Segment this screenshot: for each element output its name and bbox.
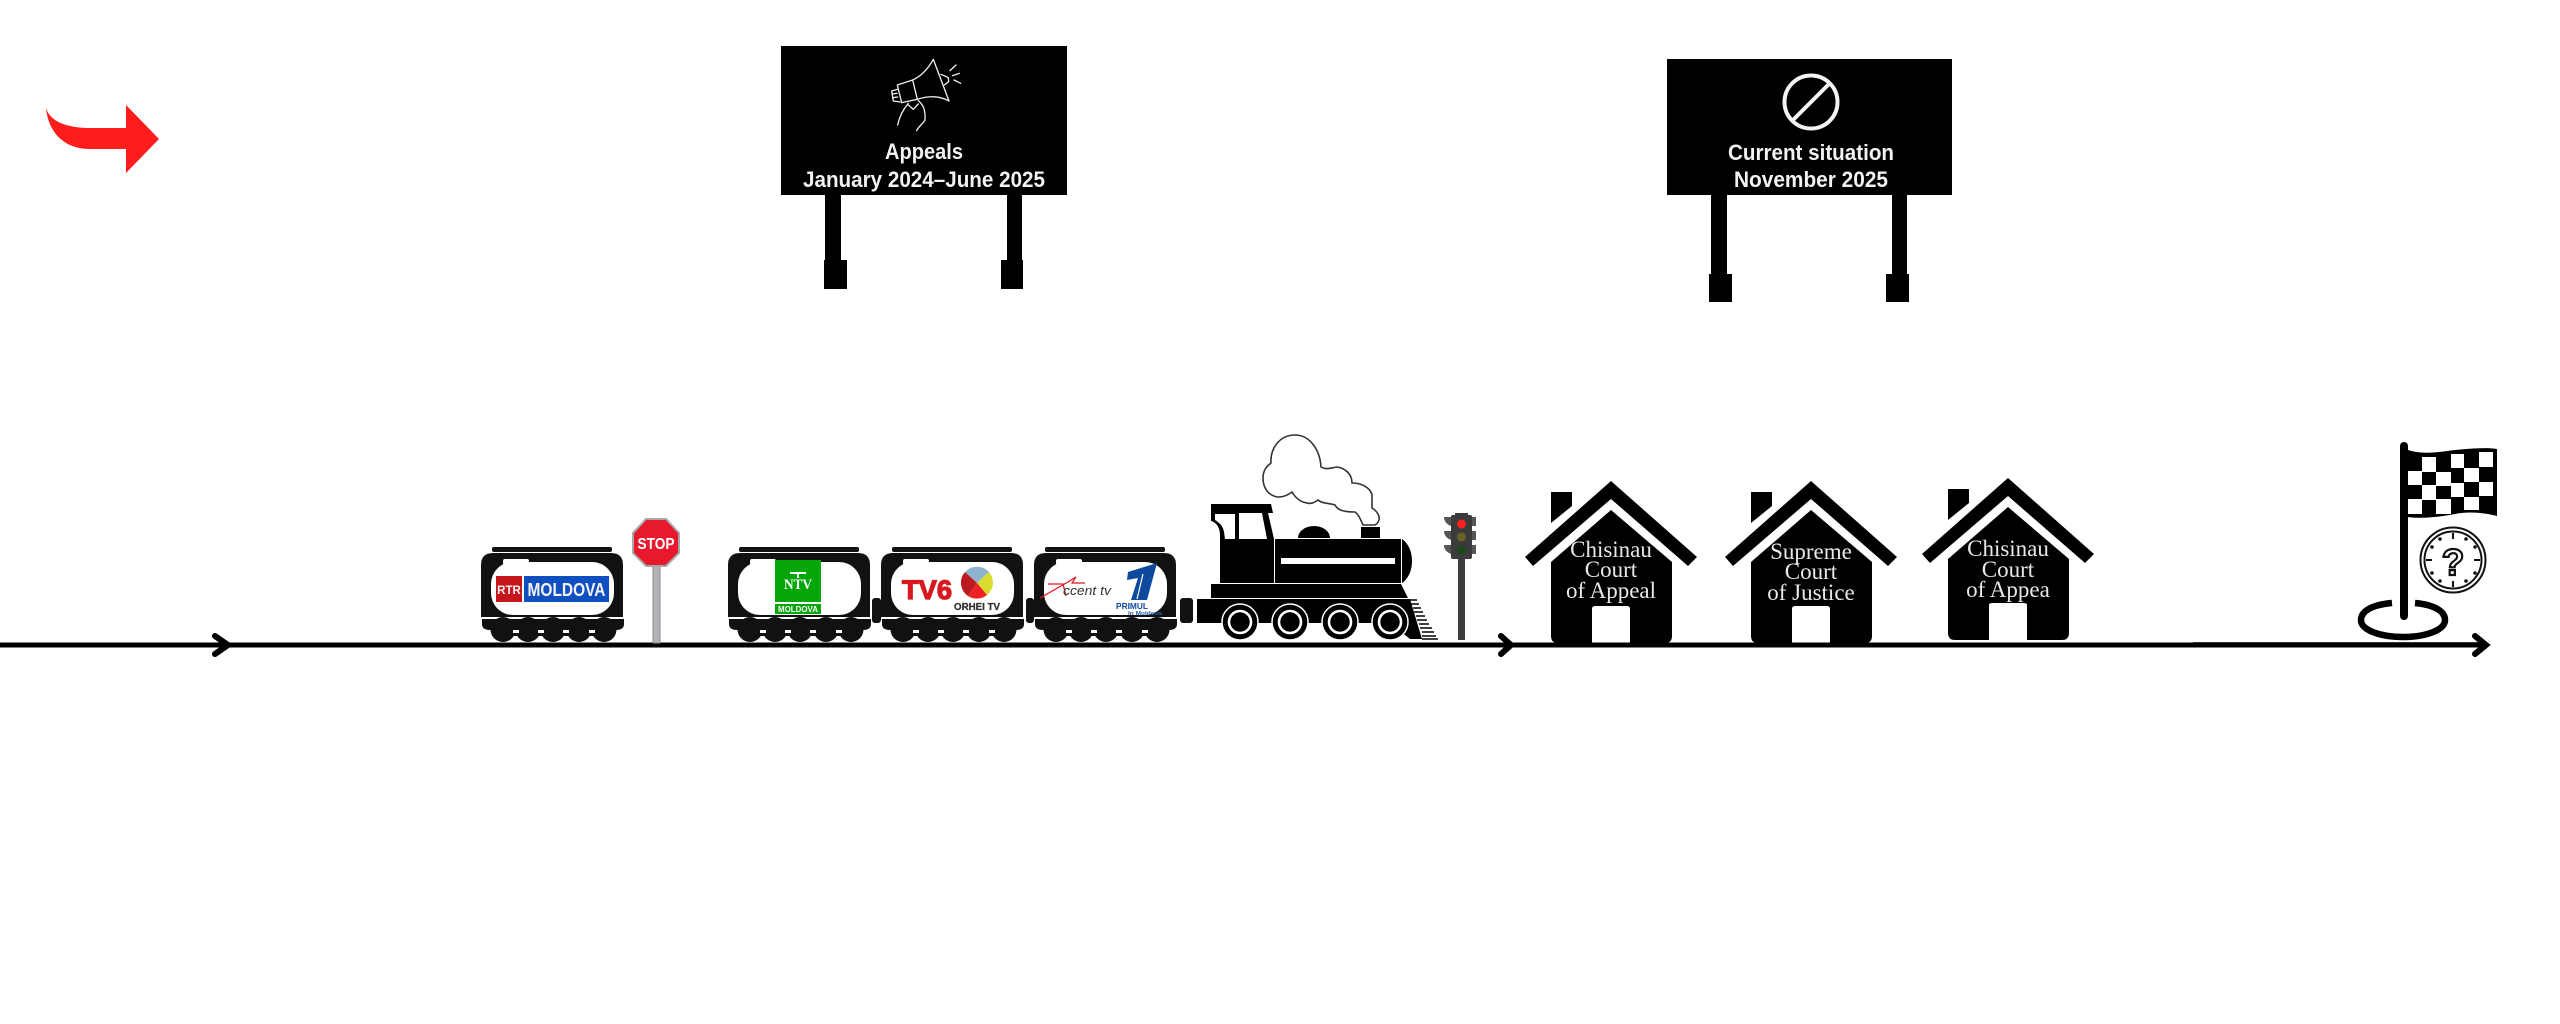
arrowhead: middle section <box>1501 636 1511 654</box>
logo: Accent TV: ccent tv <box>1063 584 1112 598</box>
billboard: current situation <box>1667 59 1952 302</box>
logo: NTV <box>775 560 821 614</box>
logo: Primul <box>1116 563 1162 617</box>
logo: RTR <box>496 576 522 602</box>
label: Orhei TV: ORHEI TV <box>954 602 1000 613</box>
house label: of Justice <box>1767 580 1855 605</box>
drive wheels <box>1222 604 1408 640</box>
house label: of Appea <box>1966 577 2050 602</box>
wagon: RTR Moldova <box>481 547 624 642</box>
flag pole <box>2400 442 2408 620</box>
coupler <box>1026 598 1034 623</box>
logo: Moldova blue band <box>524 576 609 602</box>
house label: Court <box>1585 557 1638 582</box>
logo: NTV: NTV <box>784 577 812 593</box>
door overlay <box>1989 604 2027 642</box>
house label: Court <box>1785 559 1838 584</box>
deck <box>1211 584 1408 598</box>
billboard text: appeals <box>803 139 1045 192</box>
logo: TV6: TV6 <box>902 575 952 605</box>
billboard text: current situation: Current situation <box>1728 140 1894 165</box>
checkered flag <box>2408 448 2497 518</box>
boiler stripe <box>1281 558 1395 564</box>
cab <box>1211 504 1274 583</box>
smoke cloud <box>1263 435 1379 525</box>
coupler <box>872 598 881 623</box>
billboard text: appeals: January 2024–June 2025 <box>803 167 1045 192</box>
billboard text: appeals: Appeals <box>885 139 963 164</box>
base ring <box>2361 603 2445 637</box>
boiler front <box>1402 539 1412 583</box>
wagon: Accent TV and Primul <box>1034 547 1177 642</box>
house label: Court <box>1982 557 2035 582</box>
track line <box>0 642 2486 648</box>
icon: megaphone in hand <box>892 59 961 131</box>
house: Supreme Court of Justice <box>1725 481 1897 643</box>
logo: RTR: RTR <box>497 585 522 597</box>
billboard: appeals <box>781 46 1067 289</box>
arrowhead: end of timeline <box>2475 636 2486 654</box>
billboard text: current situation <box>1728 140 1894 192</box>
logo: Moldova blue band: MOLDOVA <box>528 580 606 600</box>
icon: prohibited sign <box>1784 76 1838 128</box>
steam dome <box>1298 526 1330 538</box>
chimney <box>1361 527 1380 538</box>
icon: clock with question mark <box>2420 528 2486 592</box>
logo: Orhei TV pie <box>961 567 993 599</box>
coupler <box>1180 598 1193 623</box>
billboard text: current situation: November 2025 <box>1734 167 1888 192</box>
boiler <box>1275 539 1401 583</box>
house label: Chisinau <box>1570 537 1652 562</box>
house label: Chisinau <box>1967 536 2049 561</box>
steam locomotive <box>1180 435 1438 640</box>
icon: red curved arrow <box>46 105 159 173</box>
wagon: TV6 Orhei TV <box>881 547 1024 642</box>
house: Chisinau Court of Appeal <box>1525 481 1697 643</box>
finish flag <box>2361 442 2497 637</box>
cab windows <box>1215 513 1267 539</box>
house label: of Appeal <box>1566 578 1656 603</box>
arrowhead: first section <box>215 636 228 654</box>
stop sign: STOP <box>638 536 675 553</box>
logo: NTV: MOLDOVA <box>778 605 818 614</box>
house label: Supreme <box>1770 539 1852 564</box>
logo: Primul: în Moldova <box>1127 611 1162 617</box>
logo: Primul: PRIMUL <box>1116 601 1148 611</box>
icon: clock with question mark: ? <box>2442 542 2464 583</box>
wagon: NTV Moldova <box>728 547 871 642</box>
logo: Accent TV <box>1040 577 1112 598</box>
house: second Chisinau Court of Appeal <box>1922 478 2094 642</box>
cow catcher <box>1410 600 1438 639</box>
traffic light <box>1444 513 1476 640</box>
stop sign <box>633 519 679 643</box>
chassis and front slope <box>1197 599 1422 639</box>
